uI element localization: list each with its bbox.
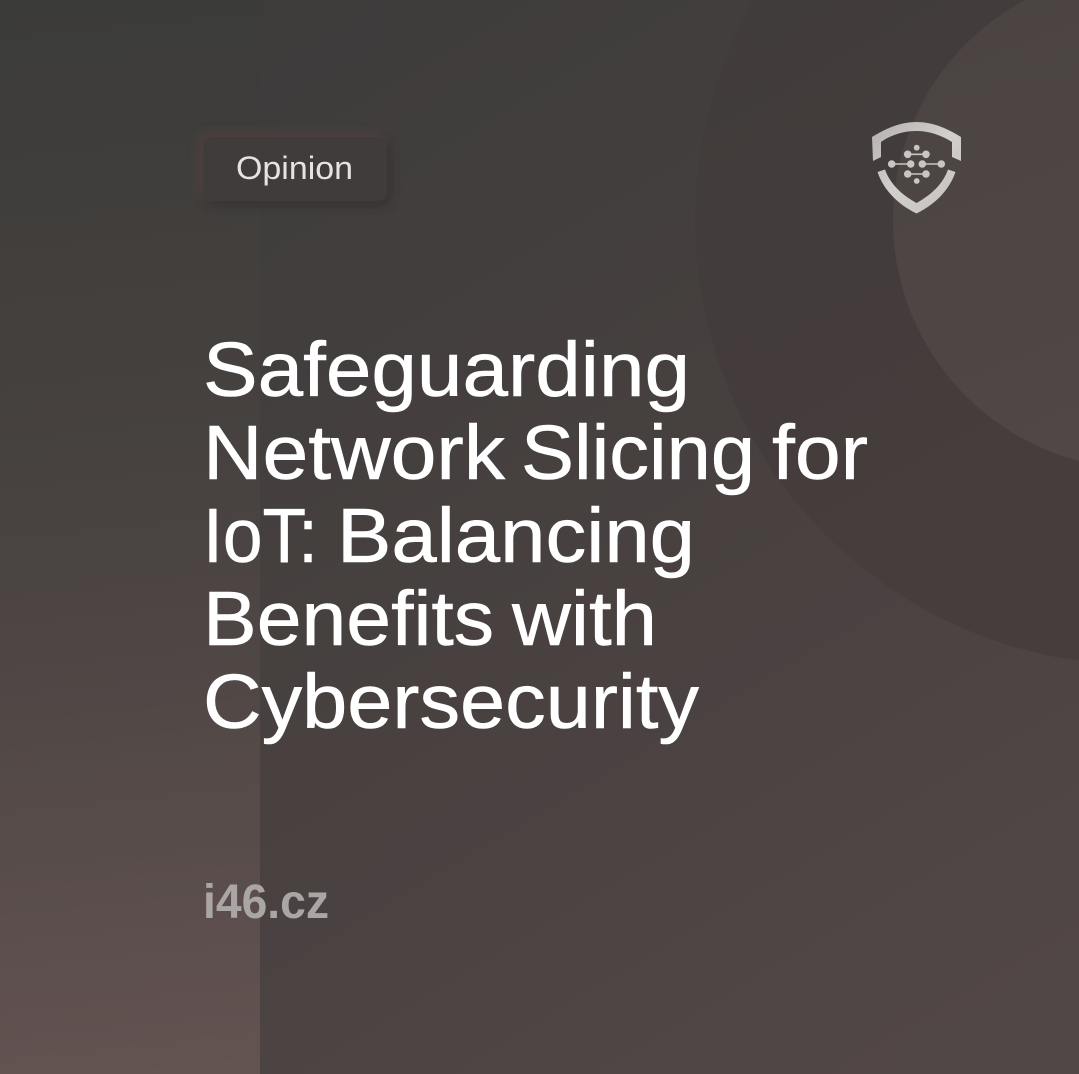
shield bottom <box>878 170 956 214</box>
icon: shield logo <box>872 122 961 214</box>
title: Benefits <box>203 576 494 662</box>
title <box>203 327 868 745</box>
title: with <box>511 576 657 662</box>
decorative outer circle <box>695 0 1079 665</box>
shield top arc <box>872 122 961 161</box>
badge label: Opinion <box>236 150 353 186</box>
title: Balancing <box>337 493 695 579</box>
badge: Opinion <box>199 133 391 206</box>
title: IoT: <box>203 493 318 579</box>
title: Network <box>203 410 506 496</box>
title: for <box>772 410 868 496</box>
title: Cybersecurity <box>203 659 700 745</box>
decorative inner circle <box>893 0 1079 469</box>
circuit nodes <box>888 145 945 184</box>
title: Safeguarding <box>203 327 690 413</box>
source: i46.cz: i46.cz <box>203 876 329 929</box>
title: Slicing <box>521 410 755 496</box>
